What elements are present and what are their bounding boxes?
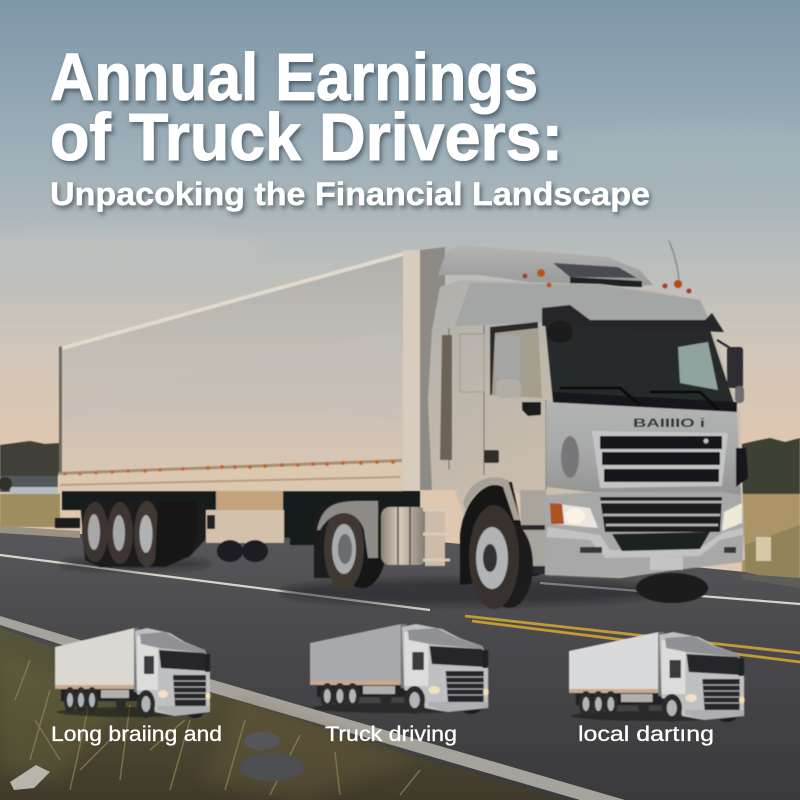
label: long braiing and: Long braiing and (51, 723, 222, 746)
mid axle tyres (217, 540, 268, 562)
front panel (546, 402, 741, 495)
roof marker lights and antenna (522, 241, 692, 294)
double yellow centre line (465, 616, 800, 662)
rear bumper (55, 518, 80, 528)
sky background (0, 0, 800, 600)
title line 2: of Truck Drivers: (50, 100, 563, 175)
roof fairing (438, 245, 653, 288)
windshield (545, 323, 737, 412)
main truck (55, 241, 748, 609)
side storage box (206, 491, 284, 543)
road surface (0, 532, 800, 800)
fog lights (580, 547, 736, 553)
left mirror (495, 335, 541, 416)
right side cut-out (736, 448, 748, 487)
trailer side marker lights (64, 460, 395, 476)
trailer axle wheels (80, 500, 205, 567)
right headlight (722, 503, 742, 531)
sun visor (542, 305, 724, 332)
small truck: truck driving (310, 624, 489, 714)
side vent (440, 335, 452, 460)
background tree line and field, left (0, 441, 60, 527)
tractor rear wheel and fender (314, 500, 386, 590)
label: local dartıng: local dartıng (578, 723, 714, 746)
door handle (484, 450, 499, 463)
cab (428, 241, 748, 609)
ground shadow (60, 558, 660, 605)
front wheel arch and step (460, 482, 540, 585)
grass verge (0, 628, 565, 800)
small truck: long-haul (55, 628, 210, 718)
trailer underframe (62, 491, 420, 545)
upper grille (592, 431, 728, 488)
wipers (560, 388, 718, 410)
side window (490, 322, 542, 398)
bumper (545, 492, 744, 577)
fuel tank (381, 507, 450, 566)
road shoulder, left (0, 526, 80, 538)
white lane lines (0, 555, 800, 610)
door seams (449, 325, 546, 490)
lower grille (600, 497, 722, 551)
right mirror (717, 340, 744, 403)
road shoulder, right (742, 574, 800, 588)
licence plate (650, 557, 683, 570)
road curb strip (0, 616, 625, 800)
subtitle: Unpacoking the Financial Landscape (50, 176, 650, 212)
background tree line and field, right (742, 438, 800, 580)
title line 1: Annual Earnings (50, 40, 538, 115)
front wheel (469, 505, 533, 609)
left headlight (550, 503, 598, 528)
title (50, 40, 650, 212)
trailer (58, 247, 445, 491)
roadside stones (10, 732, 304, 790)
roof and side shell (428, 280, 745, 578)
label: truck driving: Truck driving (325, 723, 457, 746)
small truck: local (569, 632, 745, 722)
far side front wheel (636, 573, 708, 603)
brand badge: BAIIIIO i (633, 418, 705, 430)
